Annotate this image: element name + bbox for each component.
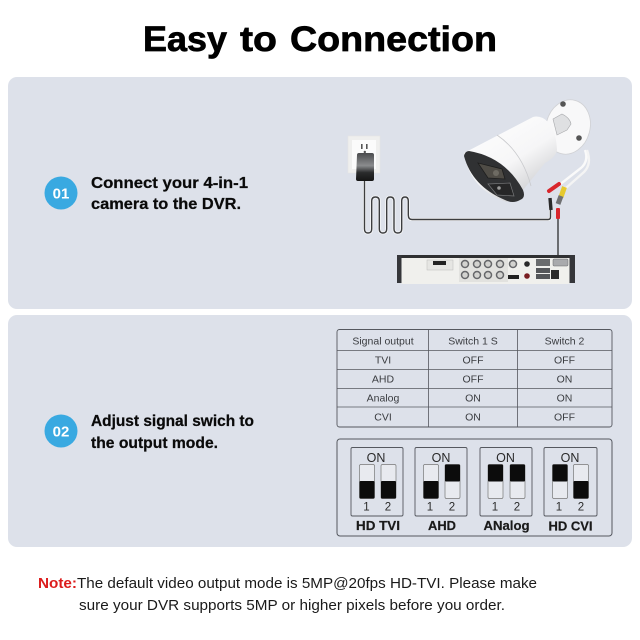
footnote: The default video output mode is 5MP@20fps HD-TVI. Please make — [77, 576, 537, 592]
icon: wall outlet and power adapter — [348, 136, 380, 181]
DIP switch: AHD: 1 — [427, 502, 433, 514]
signal output table: CVI — [374, 412, 392, 424]
footnote — [38, 576, 537, 614]
step 2 number badge — [44, 414, 78, 448]
signal output table: AHD — [372, 374, 395, 386]
DIP switch: AHD: 2 — [449, 502, 455, 514]
signal output table: Analog — [367, 392, 400, 404]
DIP switch: HD CVI: HD CVI — [548, 520, 592, 534]
DIP switch: AHD: AHD — [428, 519, 456, 533]
step 1 number badge — [44, 176, 78, 210]
signal output table: OFF — [462, 374, 484, 386]
step 2 instruction text — [91, 413, 254, 452]
step 2 number badge: 02 — [53, 424, 69, 440]
title: Connection — [290, 20, 497, 59]
step 1 instruction text — [91, 175, 248, 213]
title: Easy — [143, 20, 228, 59]
panel: step 2 adjust signal switch — [8, 315, 632, 547]
step 1 number badge: 01 — [53, 186, 69, 202]
DIP switch diagram group — [337, 439, 612, 536]
DIP switch: HD TVI: 1 — [363, 502, 370, 514]
signal output table: ON — [465, 392, 481, 404]
DIP switch: HD CVI — [544, 448, 597, 534]
signal output table: Signal output — [352, 336, 414, 348]
footnote: sure your DVR supports 5MP or higher pixels before you order. — [79, 598, 505, 614]
footnote: Note: — [38, 576, 77, 592]
signal output table — [337, 330, 612, 427]
DIP switch: HD TVI: ON — [367, 451, 385, 465]
signal output table: OFF — [462, 354, 484, 366]
DIP switch: ANalog: ANalog — [484, 519, 530, 533]
DIP switch: ANalog: ON — [496, 451, 515, 465]
DIP switch: AHD — [415, 448, 467, 533]
DIP switch: HD CVI: 1 — [556, 502, 562, 514]
step 2 instruction text: Adjust signal swich to — [91, 413, 254, 430]
signal output table: ON — [557, 374, 572, 386]
step 2 instruction text: the output mode. — [91, 435, 218, 452]
step 1 instruction text: camera to the DVR. — [91, 196, 241, 213]
DIP switch: HD TVI: 2 — [385, 502, 391, 514]
DIP switch: HD CVI: 2 — [578, 502, 584, 514]
signal output table: ON — [465, 412, 481, 424]
DIP switch: ANalog: 1 — [492, 502, 498, 514]
signal output table: OFF — [554, 412, 575, 424]
icon: camera pigtail cables and connectors — [549, 150, 589, 256]
DIP switch: ANalog — [480, 448, 532, 533]
DIP switch: ANalog: 2 — [514, 502, 520, 514]
step 1 instruction text: Connect your 4-in-1 — [91, 175, 248, 192]
signal output table: TVI — [375, 354, 391, 366]
title: to — [240, 20, 277, 59]
signal output table: Switch 1 S — [448, 336, 498, 348]
DIP switch: HD TVI: HD TVI — [356, 519, 400, 533]
DIP switch: AHD: ON — [432, 451, 450, 465]
signal output table: ON — [557, 392, 572, 404]
panel: step 1 connect camera — [8, 77, 632, 309]
DIP switch: HD TVI — [351, 448, 403, 533]
title — [143, 20, 497, 59]
icon: bullet security camera — [464, 95, 596, 202]
icon: DVR rear panel — [397, 255, 575, 284]
power cable from adapter to camera — [364, 181, 550, 233]
signal output table: OFF — [554, 354, 575, 366]
DIP switch: HD CVI: ON — [561, 451, 579, 465]
signal output table: Switch 2 — [545, 336, 584, 348]
